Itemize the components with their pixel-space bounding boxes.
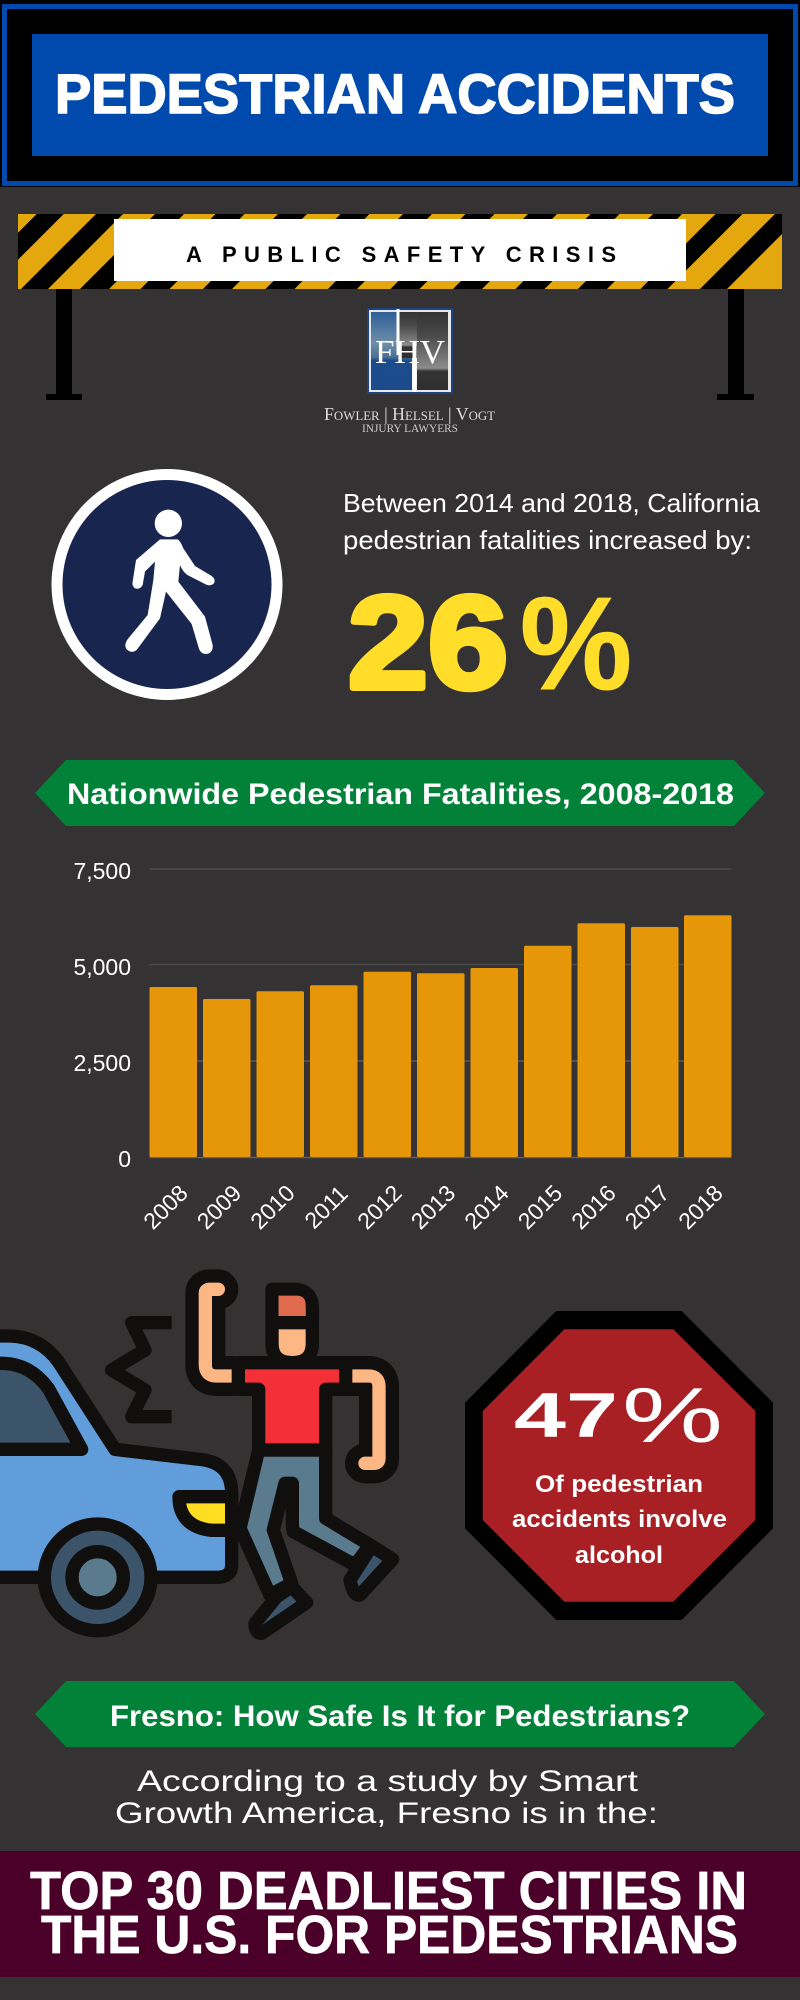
- stop sign: 47% statistic: [465, 1311, 773, 1620]
- legs: [240, 1450, 370, 1595]
- bar chart: nationwide pedestrian fatalities: [73, 858, 732, 1234]
- x axis labels: 2009: [192, 1180, 246, 1234]
- x axis labels: 2018: [673, 1180, 728, 1234]
- feet: [255, 1587, 307, 1633]
- callout band: top 30 deadliest cities: [0, 1851, 800, 1977]
- statistic text: California increase: pedestrian fatalities increased by:: [343, 525, 752, 555]
- stop sign caption: accidents involve: [512, 1506, 727, 1533]
- wheel: [44, 1524, 151, 1631]
- firm tagline: INJURY LAWYERS: [362, 421, 458, 435]
- statistic text: California increase: Between 2014 and 2018, California: [343, 488, 761, 518]
- firm name: Fowler | Helsel | Vogt: [324, 404, 495, 424]
- y axis labels: 0: [118, 1146, 131, 1172]
- study text: Growth America, Fresno is in the:: [115, 1797, 658, 1830]
- banner: Fresno heading: [35, 1681, 765, 1747]
- callout band: top 30 deadliest cities: THE U.S. FOR PEDESTRIANS: [41, 1905, 738, 1965]
- x axis labels: 2010: [245, 1180, 300, 1234]
- title: PEDESTRIAN ACCIDENTS: [55, 62, 735, 125]
- banner: Fresno heading: Fresno: How Safe Is It for Pedestrians?: [110, 1700, 690, 1733]
- icon: pedestrian sign: [52, 469, 282, 700]
- x axis labels: 2017: [620, 1180, 674, 1234]
- study text: According to a study by Smart: [137, 1765, 639, 1798]
- stop sign caption: Of pedestrian: [535, 1471, 703, 1498]
- y axis labels: [73, 858, 131, 1172]
- banner: nationwide fatalities heading: Nationwide Pedestrian Fatalities, 2008-2018: [67, 778, 734, 811]
- x axis labels: 2016: [566, 1180, 621, 1234]
- callout band: top 30 deadliest cities: TOP 30 DEADLIEST CITIES IN: [30, 1861, 747, 1921]
- x axis labels: 2011: [299, 1180, 353, 1234]
- stop sign caption: alcohol: [575, 1542, 663, 1569]
- arms: [205, 1289, 379, 1463]
- logo: Fowler Helsel Vogt: FHV: [375, 334, 445, 371]
- car body: [0, 1336, 232, 1577]
- big number: 26%: [348, 569, 632, 717]
- header panel: [0, 0, 800, 187]
- banner: nationwide fatalities heading: [35, 760, 765, 826]
- stop sign caption: [512, 1471, 727, 1569]
- subtitle: A PUBLIC SAFETY CRISIS: [186, 242, 616, 267]
- x axis labels: 2014: [459, 1180, 514, 1234]
- headlight: [179, 1497, 232, 1530]
- bars: [150, 915, 732, 1157]
- x axis labels: 2008: [138, 1180, 193, 1234]
- torso: [238, 1363, 346, 1450]
- x axis labels: 2013: [406, 1180, 460, 1234]
- x axis labels: 2012: [352, 1180, 407, 1234]
- 47 percent: 47: [514, 1381, 618, 1451]
- logo: Fowler Helsel Vogt: [324, 308, 495, 435]
- y axis labels: 2,500: [73, 1050, 131, 1076]
- x axis labels: 2015: [513, 1180, 567, 1234]
- barricade: [0, 214, 800, 400]
- impact zigzag: [112, 1323, 172, 1417]
- 47 percent: %: [622, 1371, 723, 1459]
- car window: [0, 1363, 82, 1449]
- head: [272, 1289, 312, 1363]
- big number: 26%: 26: [348, 569, 508, 716]
- x axis labels: [138, 1180, 728, 1234]
- y axis labels: 5,000: [73, 954, 131, 980]
- study text: [115, 1765, 658, 1830]
- big number: 26%: %: [520, 570, 632, 717]
- statistic text: California increase: [343, 488, 761, 555]
- y axis labels: 7,500: [73, 858, 131, 884]
- 47 percent: [514, 1371, 723, 1459]
- icon: car hitting pedestrian: [0, 1289, 393, 1633]
